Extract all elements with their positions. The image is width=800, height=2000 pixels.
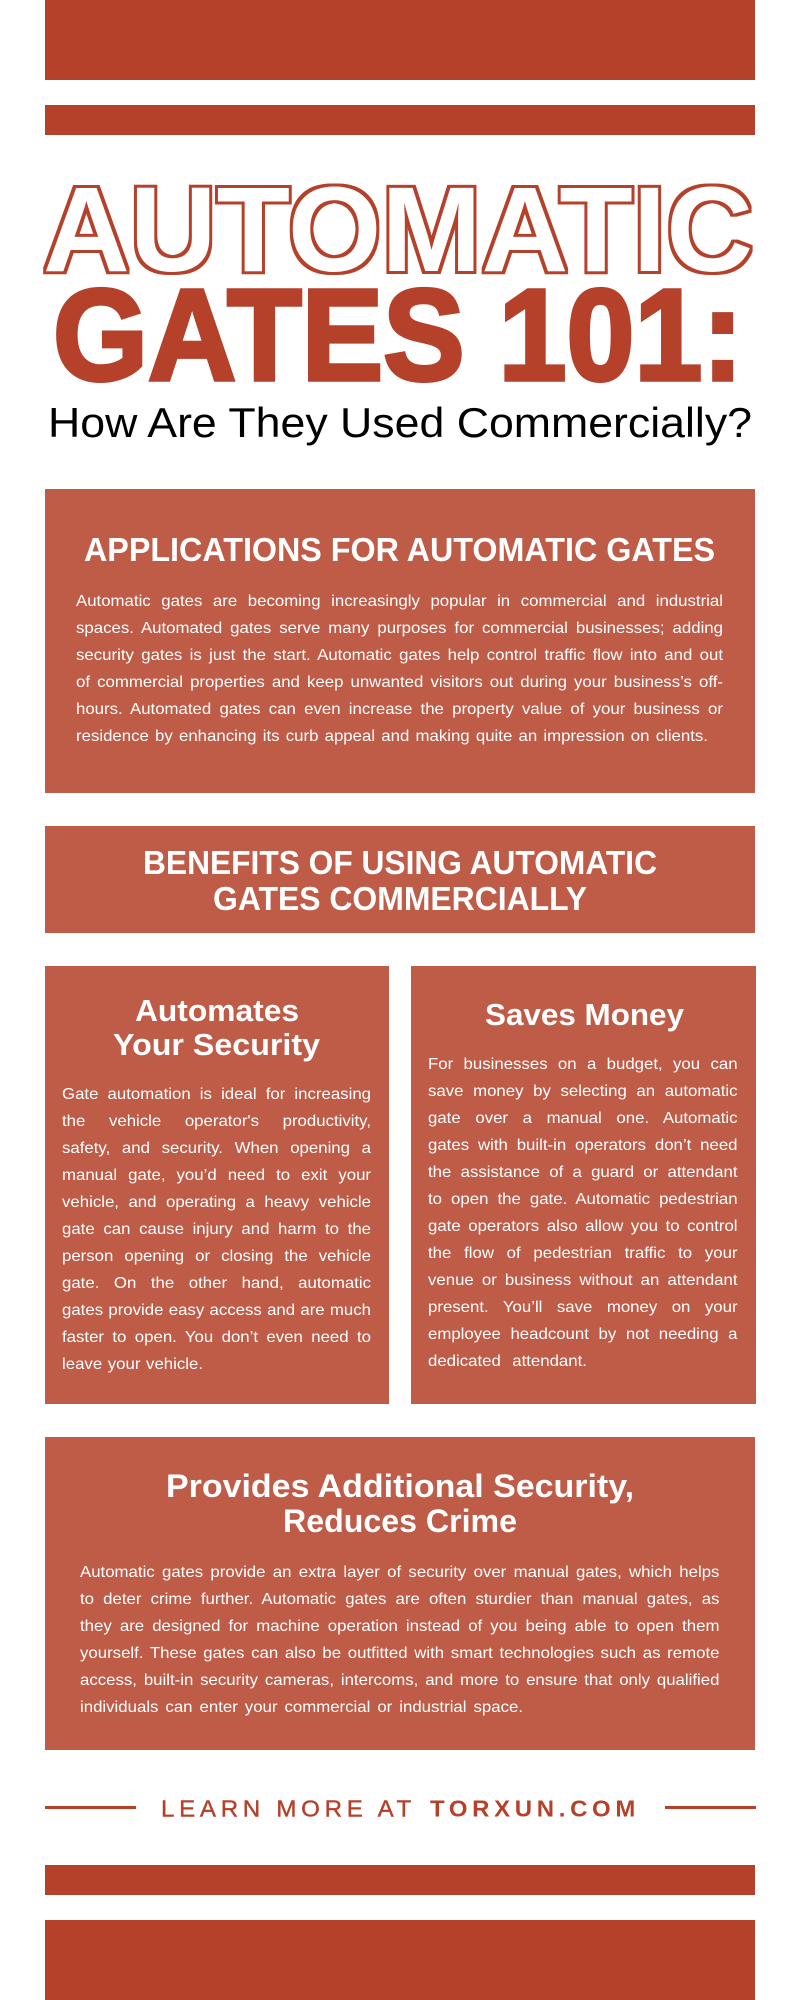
text: automates body: vehicle, and operating a heavy vehicle [62, 1194, 371, 1211]
top band [45, 0, 755, 80]
title: AUTOMATIC outlined: AUTOMATIC [43, 161, 753, 297]
text: saves money body: gate operators also allow you to control [428, 1218, 738, 1234]
heading: benefits [143, 844, 657, 917]
text: additional security body: Automatic gates provide an extra layer of security over manual gates, which helps [80, 1564, 719, 1581]
heading: saves money: Saves Money [485, 997, 685, 1032]
text: applications body: Automatic gates are becoming increasingly popular in commercial and industrial [76, 593, 723, 610]
text: automates body: faster to open. You don’t even need to [62, 1329, 371, 1346]
heading: automates your security [113, 993, 321, 1062]
heading: benefits: GATES COMMERCIALLY [213, 880, 587, 917]
text: automates body: Gate automation is ideal for increasing [62, 1086, 371, 1103]
heading: automates your security: Your Security [113, 1027, 321, 1062]
text: automates body: gate can cause injury and harm to the [62, 1221, 371, 1238]
panel: applications [45, 489, 755, 793]
text: saves money body: For businesses on a budget, you can [428, 1056, 738, 1072]
text: automates body: manual gate, you’d need to exit your [62, 1167, 371, 1184]
text: saves money body: save money by selecting an automatic [428, 1082, 738, 1100]
panel: additional security [45, 1437, 755, 1750]
heading: benefits: BENEFITS OF USING AUTOMATIC [143, 844, 657, 881]
footer right rule [665, 1806, 756, 1809]
text: automates body [62, 1086, 371, 1373]
text: additional security body: access, built-in security cameras, intercoms, and more to ensure that only qualified [80, 1672, 719, 1689]
text: applications body: security gates is just the start. Automatic gates help control traffic flow into and out [76, 647, 723, 664]
panel: saves money [411, 966, 756, 1404]
text: saves money body [428, 1056, 738, 1370]
text: automates body: the vehicle operator's productivity, [62, 1113, 371, 1130]
text: saves money body: the flow of pedestrian traffic to your [428, 1244, 738, 1262]
text: additional security body: individuals can enter your commercial or industrial space. [80, 1699, 523, 1716]
footer text: TORXUN.COM [430, 1796, 640, 1822]
panel: benefits heading [45, 826, 755, 933]
text: additional security body [80, 1564, 719, 1716]
text: saves money body: present. You’ll save money on your [428, 1298, 738, 1316]
text: saves money body: employee headcount by not needing a [428, 1326, 738, 1342]
footer text [161, 1796, 640, 1822]
heading: applications: APPLICATIONS FOR AUTOMATIC GATES [84, 531, 715, 568]
text: automates body: gates provide easy access and are much [62, 1302, 371, 1319]
subtitle: How Are They Used Commercially? [48, 399, 752, 446]
text: applications body: hours. Automated gates can even increase the property value of your business or [76, 701, 723, 718]
text: saves money body: the assistance of a guard or attendant [428, 1164, 738, 1180]
text: saves money body: gates with built-in operators don’t need [428, 1136, 738, 1154]
bottom band [45, 1920, 755, 2000]
bottom thin band [45, 1865, 755, 1895]
text: applications body: residence by enhancing its curb appeal and making quite an impression on clients. [76, 728, 708, 745]
text: automates body: gate. On the other hand, automatic [62, 1275, 371, 1292]
text: applications body: of commercial properties and keep unwanted visitors out during your business’s off- [76, 674, 723, 691]
text: saves money body: gate over a manual one. Automatic [428, 1110, 738, 1126]
text: automates body: person opening or closing the vehicle [62, 1248, 371, 1265]
footer call to action [45, 1796, 756, 1822]
text: additional security body: they are designed for machine operation instead of you being able to open them [80, 1618, 719, 1635]
heading: additional security [166, 1468, 634, 1539]
title: GATES 101:: GATES 101: [53, 262, 743, 408]
panel: automates your security [45, 966, 389, 1404]
text: applications body [76, 593, 723, 745]
heading: additional security: Reduces Crime [283, 1503, 517, 1539]
text: automates body: safety, and security. When opening a [62, 1140, 371, 1157]
top thin band [45, 105, 755, 135]
text: applications body: spaces. Automated gates serve many purposes for commercial businesses; adding [76, 620, 723, 637]
text: additional security body: to deter crime further. Automatic gates are often sturdier than manual gates, as [80, 1591, 719, 1608]
footer text: LEARN MORE AT [161, 1796, 416, 1822]
text: additional security body: yourself. These gates can also be outfitted with smart technologies such as remote [80, 1645, 719, 1662]
text: saves money body: to open the gate. Automatic pedestrian [428, 1190, 738, 1208]
heading: automates your security: Automates [135, 993, 299, 1028]
text: automates body: leave your vehicle. [62, 1356, 203, 1373]
heading: additional security: Provides Additional Security, [166, 1468, 634, 1504]
text: saves money body: dedicated attendant. [428, 1352, 587, 1370]
footer left rule [45, 1806, 136, 1809]
text: saves money body: venue or business without an attendant [428, 1272, 738, 1288]
